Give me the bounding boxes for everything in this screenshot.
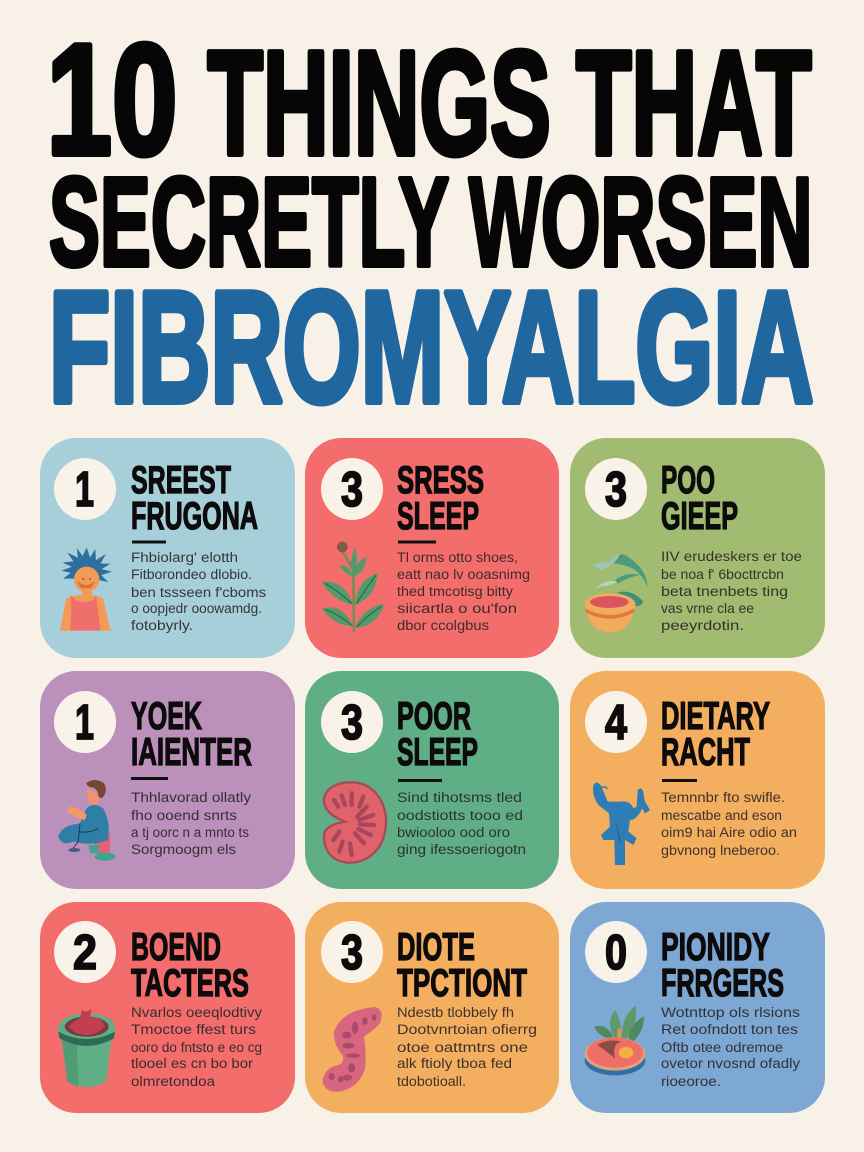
panel: card 9: ovetor nvosnd ofadly: [661, 1056, 800, 1071]
panel: card 7: Nvarlos oeeqlodtivy: [131, 1005, 262, 1020]
panel: card 8: Dootvnrtoian ofierrg: [397, 1022, 537, 1037]
panel: card 7: olmretondoa: [131, 1074, 216, 1089]
panel: card 3: peeyrdotin.: [661, 618, 744, 633]
panel: card 2: thed tmcotisg bitty: [397, 584, 513, 599]
panel: card 9: Ret oofndott ton tes: [661, 1022, 798, 1037]
panel: card 1: SREEST: [131, 459, 231, 502]
panel: card 8: TPCTIONT: [397, 962, 527, 1005]
panel: card 6: mescatbe and eson: [661, 808, 782, 823]
panel: card 9: Wotnttop ols rlsions: [661, 1005, 800, 1020]
icon: plate with food and leaves: [585, 1006, 645, 1075]
panel: card 5: ging ifessoeriogotn: [397, 842, 526, 857]
panel: card 5: Sind tihotsms tled: [397, 790, 522, 805]
panel: card 6: DIETARY: [661, 695, 770, 738]
panel: card 8: otoe oattmtrs one: [397, 1040, 528, 1055]
panel: card 8: Ndestb tlobbely fh: [397, 1005, 514, 1020]
panel: card 4: Thhlavorad ollatly: [131, 790, 251, 805]
panel: card 2: Tl orms otto shoes,: [397, 550, 518, 565]
panel: card 9: PIONIDY: [661, 926, 770, 969]
panel: card 9: Oftb otee odremoe: [661, 1040, 783, 1055]
panel: card 4: fho ooend snrts: [131, 808, 237, 823]
panel: card 3: [570, 438, 825, 658]
panel: card 4: a tj oorc n a mnto ts: [131, 825, 249, 840]
panel: card 9: rioeoroe.: [661, 1074, 721, 1089]
panel: card 3: GIEEP: [661, 495, 738, 538]
panel: card 7: TACTERS: [131, 962, 249, 1005]
panel: card 3: beta tnenbets ting: [661, 584, 788, 599]
panel: card 4: 1: [75, 696, 94, 750]
icon: green bucket: [58, 1009, 115, 1087]
panel: card 1: Fhbiolarg' elotth: [131, 550, 238, 565]
panel: card 5: [305, 671, 559, 889]
panel: card 1: o oopjedr ooowamdg.: [131, 601, 262, 616]
panel: card 2: SRESS: [397, 459, 484, 502]
panel: card 7: tlooel es cn bo bor: [131, 1056, 254, 1071]
title: 10: [46, 12, 178, 188]
panel: card 3: be noa f' 6bocttrcbn: [661, 567, 784, 582]
panel: card 2: [305, 438, 559, 658]
panel: card 1: FRUGONA: [131, 495, 258, 538]
panel: card 6: Temnnbr fto swifle.: [661, 790, 785, 805]
panel: card 9: [570, 902, 825, 1113]
panel: card 8: tdobotioall.: [397, 1074, 466, 1089]
icon: kidney cross-section: [324, 782, 386, 863]
panel: card 4: Sorgmoogm els: [131, 842, 236, 857]
panel: card 1: ben tssseen f'cboms: [131, 585, 266, 600]
panel: card 5: oodstiotts tooo ed: [397, 808, 523, 823]
panel: card 4: YOEK: [131, 695, 202, 738]
panel: card 9: 0: [605, 926, 627, 980]
panel: card 5: 3: [341, 696, 363, 750]
panel: card 3: vas vrne cla ee: [661, 601, 754, 616]
icon: bowl with steam leaves: [585, 554, 648, 632]
panel: card 3: POO: [661, 459, 715, 502]
panel: card 8: DIOTE: [397, 926, 475, 969]
icon: seated person: [58, 780, 116, 861]
panel: card 7: [40, 902, 295, 1113]
panel: card 5: POOR: [397, 695, 471, 738]
panel: card 7: Tmoctoe ffest turs: [131, 1022, 256, 1037]
panel: card 9: FRRGERS: [661, 962, 784, 1005]
panel: card 2: 3: [341, 463, 363, 517]
icon: intestine shape: [323, 1007, 382, 1092]
icon: green plant: [322, 542, 384, 632]
panel: card 6: [570, 671, 825, 889]
panel: card 2: SLEEP: [397, 495, 479, 538]
panel: card 7: 2: [73, 926, 97, 980]
panel: card 6: oim9 hai Aire odio an: [661, 825, 797, 840]
panel: card 2: siicartla o ou'fon: [397, 601, 517, 616]
panel: card 8: [305, 902, 559, 1113]
title: [46, 12, 814, 436]
panel: card 6: 4: [605, 696, 627, 750]
panel: card 8: alk ftioly tboa fed: [397, 1056, 512, 1071]
icon: blue stretching figure: [593, 783, 650, 865]
panel: card 3: IIV erudeskers er toe: [661, 549, 802, 564]
panel: card 1: fotobyrly.: [131, 618, 193, 633]
panel: card 5: SLEEP: [397, 731, 478, 774]
panel: card 2: eatt nao lv ooasnimg: [397, 567, 530, 582]
panel: card 8: 3: [341, 926, 363, 980]
panel: card 3: 3: [605, 463, 627, 517]
panel: card 4: IAIENTER: [131, 731, 252, 774]
panel: card 2: dbor ccolgbus: [397, 618, 489, 633]
panel: card 1: [40, 438, 295, 658]
panel: card 1: 1: [75, 463, 94, 517]
panel: card 4: [40, 671, 295, 889]
panel: card 5: bwiooloo ood oro: [397, 825, 510, 840]
panel: card 6: gbvnong lneberoo.: [661, 843, 780, 858]
panel: card 1: Fitborondeo dlobio.: [131, 567, 252, 582]
icon: spiky-haired person: [60, 548, 112, 631]
panel: card 7: BOEND: [131, 926, 221, 969]
panel: card 7: ooro do fntsto e eo cg: [131, 1040, 262, 1055]
panel: card 6: RACHT: [661, 731, 750, 774]
